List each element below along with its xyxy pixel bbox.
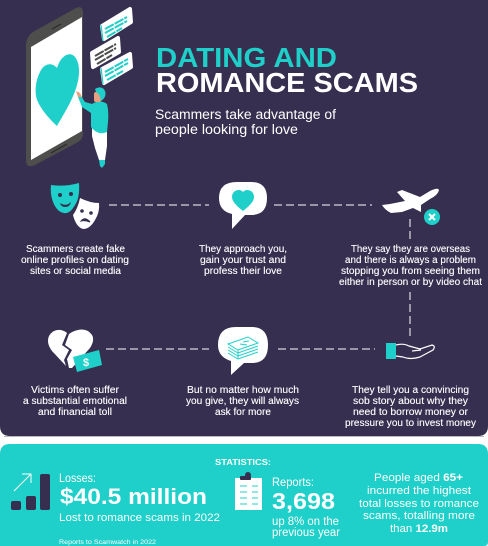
chat bubble: bottom — [101, 54, 131, 84]
text: step 2 — [199, 244, 287, 277]
text: step 1 — [21, 244, 129, 277]
text: step 3 — [339, 244, 482, 288]
icon: plane with cross — [382, 189, 440, 225]
icon: phone — [26, 7, 83, 166]
text: step 4: need to borrow money or — [353, 407, 469, 418]
title: ROMANCE SCAMS — [156, 67, 418, 98]
arrow: dashed connector bubble to plane — [274, 204, 372, 206]
text: step 6: and financial toll — [38, 407, 112, 418]
text: step 1: sites or social media — [30, 266, 121, 277]
footnote: Reports to Scamwatch in 2022 — [59, 540, 157, 546]
panel: dark main panel — [0, 0, 488, 436]
stat: reports: 3,698 — [272, 488, 335, 514]
text: step 3: They say they are overseas — [351, 244, 470, 255]
text: step 5 — [186, 385, 299, 418]
text: step 4: pressure you to invest money — [345, 418, 476, 429]
text: step 3: stopping you from seeing them — [341, 266, 480, 277]
icon: heart on phone — [36, 54, 79, 126]
text: step 4: They tell you a convincing — [352, 385, 469, 396]
subtitle — [155, 107, 336, 137]
text: step 3: either in person or by video chat — [339, 277, 482, 288]
text: step 6 — [23, 385, 127, 418]
illustration: phone with person and chat bubbles — [26, 7, 131, 168]
text: step 6: Victims often suffer — [31, 385, 120, 396]
icon: speech bubble with heart — [219, 182, 267, 229]
arrow: dashed connector masks to bubble — [109, 204, 209, 206]
stat: people aged 65+: total losses to romance — [359, 498, 479, 510]
title — [156, 42, 418, 98]
title: DATING AND — [156, 42, 337, 73]
text: step 4: sob story about why they — [353, 396, 468, 407]
stat: reports: Reports: — [272, 475, 314, 489]
icon: open hand — [386, 343, 434, 359]
text: step 1: online profiles on dating — [21, 255, 129, 266]
text: step 3: and there is always a problem — [345, 255, 476, 266]
stat: losses: $40.5 million — [60, 484, 207, 509]
stat: people aged 65+: scams, totalling more — [363, 510, 475, 522]
text: step 1: Scammers create fake — [26, 244, 125, 255]
stat: losses: Losses: — [59, 471, 96, 485]
text: step 5: you give, they will always — [186, 396, 299, 407]
icon: clipboard — [235, 472, 262, 510]
text: step 2: profess their love — [204, 266, 282, 277]
text: step 4 — [345, 385, 476, 429]
icon: broken heart with banknote: $ — [83, 357, 89, 369]
arrow: dashed connector hand to money — [278, 348, 375, 350]
icon: broken heart with banknote — [48, 330, 102, 372]
icon: speech bubble with money stack — [218, 327, 268, 375]
stat: losses — [59, 471, 220, 524]
text: step 6: a substantial emotional — [23, 396, 127, 407]
text: step 5: But no matter how much — [187, 385, 299, 396]
stat: reports: up 8% on the — [272, 516, 339, 528]
stat: reports: previous year — [272, 527, 340, 539]
subtitle: people looking for love — [155, 122, 298, 137]
stat: people aged 65+: People aged 65+ — [374, 472, 463, 484]
icon: person — [76, 87, 108, 168]
icon: theatre masks — [51, 183, 99, 229]
heading: statistics: STATISTICS: — [215, 457, 271, 467]
icon: rising bar chart — [11, 474, 50, 510]
arrow: dashed connector money to heart — [106, 348, 209, 350]
text: step 2: They approach you, — [199, 244, 287, 255]
text: step 5: ask for more — [215, 407, 271, 418]
stat: people aged 65+: incurred the highest — [367, 485, 471, 497]
panel: statistics — [0, 444, 488, 546]
stat: people aged 65+ — [359, 472, 479, 535]
stat: people aged 65+: than 12.9m — [390, 523, 448, 535]
chat bubble: top — [101, 9, 131, 41]
stat: losses: Lost to romance scams in 2022 — [59, 512, 220, 524]
arrow: dashed connector plane to hand — [409, 219, 411, 337]
text: step 2: gain your trust and — [200, 255, 286, 266]
chat bubble: middle — [92, 38, 119, 67]
stat: reports — [272, 475, 340, 539]
subtitle: Scammers take advantage of — [155, 107, 336, 122]
